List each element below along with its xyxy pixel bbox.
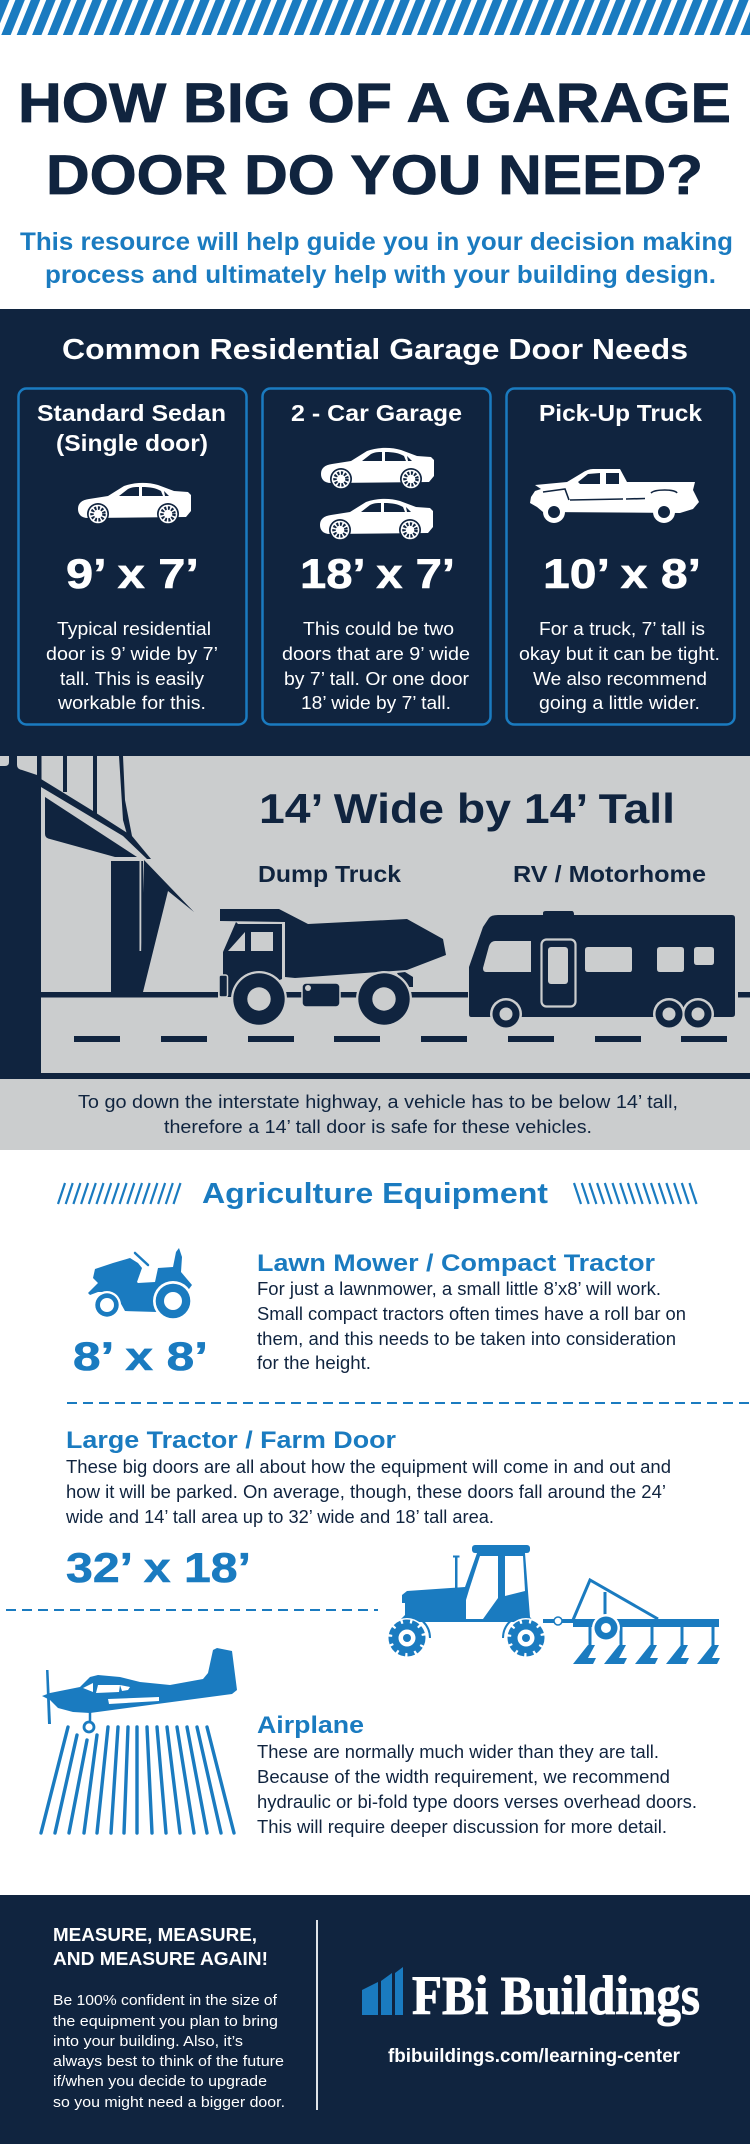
- heading: agriculture equipment: Agriculture Equipment: [202, 1178, 548, 1210]
- section: airplane: [41, 1648, 697, 1837]
- title: DOOR DO YOU NEED?: [46, 143, 703, 206]
- icon: two cars: [320, 448, 434, 541]
- section: large tractor: [6, 1427, 720, 1664]
- text: lawn mower: for the height.: [257, 1352, 371, 1373]
- text: airplane: Because of the width requirement, we recommend: [257, 1766, 670, 1787]
- panel: footer: [0, 1895, 750, 2144]
- text: large tractor: These big doors are all about how the equipment will come in and out and: [66, 1456, 671, 1477]
- footer heading: [53, 1925, 268, 1969]
- size: 8 x 8: 8’ x 8’: [73, 1335, 208, 1379]
- card: pick-up truck: [506, 388, 734, 724]
- subheading: large tractor: Large Tractor / Farm Door: [66, 1427, 396, 1454]
- card text: truck: For a truck, 7’ tall is: [539, 618, 705, 639]
- footer text: [53, 1993, 285, 2111]
- text: airplane: [257, 1741, 697, 1837]
- footer text: into your building. Also, it’s: [53, 2034, 243, 2050]
- size: 32 x 18: 32’ x 18’: [66, 1544, 251, 1591]
- text: lawn mower: [257, 1278, 686, 1373]
- caption: interstate height: therefore a 14’ tall door is safe for these vehicles.: [164, 1116, 592, 1137]
- icon: dump truck: [219, 909, 446, 1027]
- card text: sedan: workable for this.: [57, 692, 206, 713]
- section: lawn mower: [73, 1248, 686, 1379]
- subtitle: This resource will help guide you in your decision making: [20, 228, 733, 256]
- icon: crop duster airplane: [42, 1648, 237, 1732]
- text: lawn mower: them, and this needs to be taken into consideration: [257, 1328, 676, 1349]
- size: 18 x 7: 18’ x 7’: [300, 550, 455, 597]
- road dashes: [74, 1036, 727, 1042]
- text: lawn mower: For just a lawnmower, a small little 8’x8’ will work.: [257, 1278, 661, 1299]
- card title: standard sedan: [37, 400, 226, 456]
- card: standard sedan: [18, 388, 246, 724]
- text: airplane: hydraulic or bi-fold type doors verses overhead doors.: [257, 1791, 697, 1812]
- footer heading: MEASURE, MEASURE,: [53, 1925, 257, 1945]
- footer heading: AND MEASURE AGAIN!: [53, 1949, 268, 1969]
- card text: 2-car: doors that are 9’ wide: [282, 643, 470, 664]
- footer text: so you might need a bigger door.: [53, 2095, 285, 2111]
- caption: interstate height: [78, 1091, 678, 1137]
- card text: sedan: tall. This is easily: [60, 668, 205, 689]
- url: fbibuildings.com/learning-center: [388, 2046, 681, 2067]
- illustration: bridge and road: [0, 756, 750, 1079]
- footer text: always best to think of the future: [53, 2054, 284, 2070]
- card text: truck: We also recommend: [533, 668, 707, 689]
- card text: sedan: Typical residential: [57, 618, 211, 639]
- subtitle: process and ultimately help with your building design.: [45, 261, 716, 289]
- footer text: if/when you decide to upgrade: [53, 2074, 267, 2090]
- text: large tractor: wide and 14’ tall area up to 32’ wide and 18’ tall area.: [65, 1506, 494, 1527]
- card text: 2-car: This could be two: [303, 618, 454, 639]
- card title: standard sedan: (Single door): [56, 430, 208, 456]
- card text: truck: going a little wider.: [539, 692, 700, 713]
- icon: tractor with cultivator: [387, 1545, 720, 1664]
- text: large tractor: how it will be parked. On average, though, these doors fall around the 24’: [66, 1481, 666, 1502]
- card text: truck: okay but it can be tight.: [519, 643, 720, 664]
- footer text: Be 100% confident in the size of: [53, 1993, 278, 2009]
- card: 2-car garage: [262, 388, 490, 724]
- label: rv motorhome: RV / Motorhome: [513, 861, 706, 887]
- card title: 2-car garage: 2 - Car Garage: [291, 400, 462, 426]
- subtitle: [20, 228, 733, 289]
- text: lawn mower: Small compact tractors often times have a roll bar on: [257, 1303, 686, 1324]
- logo: FBi Buildings: FBi Buildings: [412, 1965, 700, 2026]
- label: dump truck: Dump Truck: [258, 861, 402, 887]
- subheading: airplane: Airplane: [257, 1712, 364, 1739]
- card text: 2-car: by 7’ tall. Or one door: [284, 668, 469, 689]
- card text: sedan: [46, 618, 218, 713]
- card text: 2-car: 18’ wide by 7’ tall.: [301, 692, 451, 713]
- card title: standard sedan: Standard Sedan: [37, 400, 226, 426]
- icon: rv motorhome: [469, 911, 735, 1030]
- title: [18, 71, 731, 206]
- card text: sedan: door is 9’ wide by 7’: [46, 643, 218, 664]
- footer text: the equipment you plan to bring: [53, 2014, 278, 2030]
- top stripe band: [0, 0, 750, 35]
- caption: interstate height: To go down the interstate highway, a vehicle has to be below 14’ tall,: [78, 1091, 678, 1112]
- subheading: lawn mower: Lawn Mower / Compact Tractor: [257, 1250, 656, 1277]
- heading: 14 wide by 14 tall: 14’ Wide by 14’ Tall: [259, 785, 675, 832]
- icon: spray lines: [41, 1727, 234, 1833]
- heading: common residential: Common Residential Garage Door Needs: [62, 334, 688, 366]
- text: large tractor: [65, 1456, 671, 1527]
- text: airplane: These are normally much wider than they are tall.: [257, 1741, 659, 1762]
- icon: sedan: [78, 483, 191, 525]
- size: 10 x 8: 10’ x 8’: [543, 550, 701, 597]
- icon: pick-up truck: [530, 469, 699, 523]
- card title: pick-up truck: Pick-Up Truck: [539, 400, 703, 426]
- title: HOW BIG OF A GARAGE: [18, 71, 731, 134]
- heading: agriculture equipment: [58, 1178, 696, 1210]
- card text: 2-car: [282, 618, 470, 713]
- icon: lawn mower: [88, 1248, 193, 1321]
- card text: truck: [519, 618, 720, 713]
- panel: common residential garage door needs: [0, 309, 750, 756]
- size: 9 x 7: 9’ x 7’: [66, 550, 199, 597]
- text: airplane: This will require deeper discussion for more detail.: [257, 1816, 667, 1837]
- panel: highway: [0, 756, 750, 1150]
